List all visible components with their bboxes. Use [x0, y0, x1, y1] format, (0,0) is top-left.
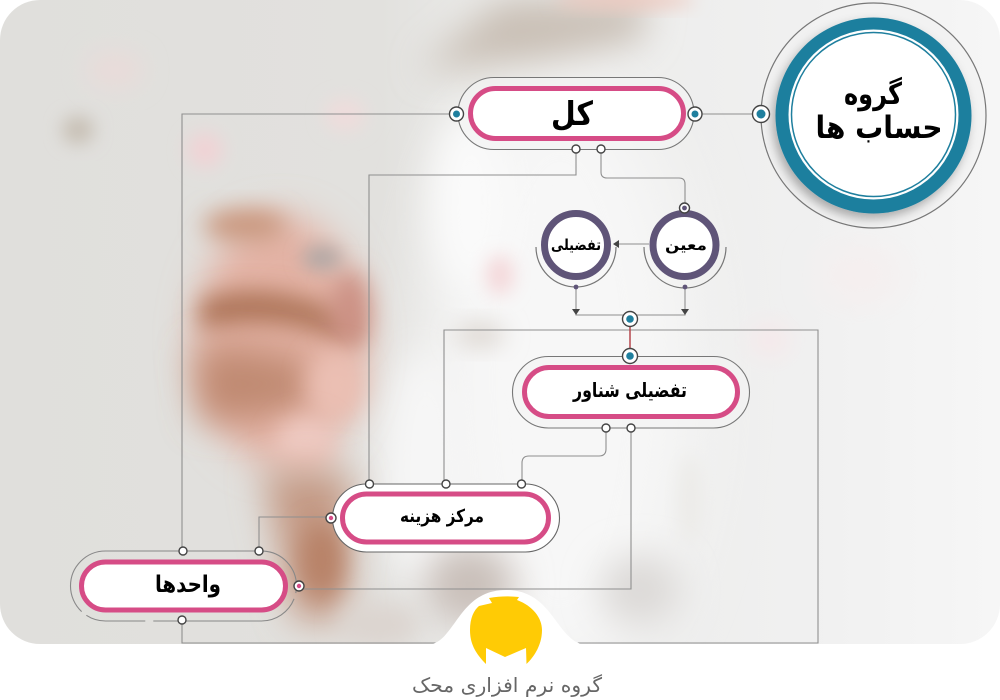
logo: yellow head [470, 596, 542, 664]
main circle: account groups [761, 3, 986, 228]
pill: cost center [332, 484, 560, 552]
circle: moein [644, 214, 726, 288]
red connector [629, 326, 631, 350]
connector lines [182, 114, 818, 643]
pill: total: کل [551, 94, 594, 133]
pill: cost center: مرکز هزینه [400, 506, 484, 527]
pill: floating detail [512, 356, 750, 428]
circle: tafsili [536, 214, 616, 287]
pill: total [458, 78, 694, 150]
connector nodes [178, 106, 770, 624]
logo: white dome [428, 590, 586, 645]
pill: units [70, 551, 296, 621]
circle: moein: معین [665, 236, 707, 254]
pill: floating detail: تفضیلی شناور [572, 378, 687, 402]
pill: units: واحدها [155, 572, 221, 598]
circle: tafsili: تفضیلی [551, 236, 601, 254]
arrow heads [572, 240, 689, 315]
logo: company name: گروه نرم افزاری محک [412, 673, 602, 697]
title line 2: حساب ها [816, 110, 942, 146]
title line 1: گروه [844, 76, 902, 112]
